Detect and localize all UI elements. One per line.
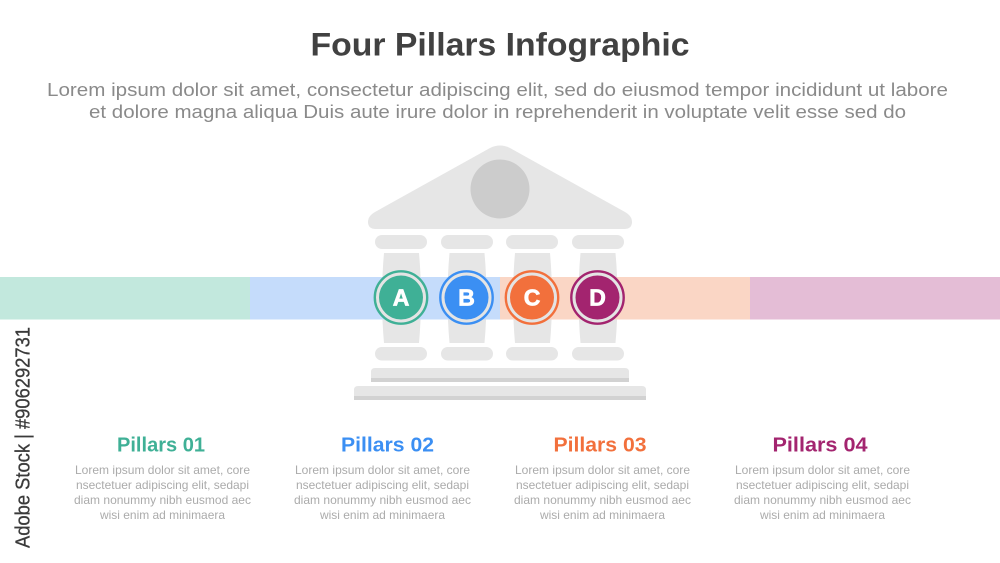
badge B: B bbox=[458, 284, 475, 310]
pillars 04 description: wisi enim ad minimaera bbox=[759, 508, 885, 522]
pillars 03 description bbox=[514, 463, 691, 522]
panel: pillars 01 bbox=[74, 434, 251, 522]
pillars 04 heading: Pillars 04 bbox=[772, 434, 868, 456]
panel: pillars 04 bbox=[734, 434, 911, 522]
pillars 04 description bbox=[734, 463, 911, 522]
pillars 01 heading: Pillars 01 bbox=[117, 434, 205, 456]
pillars 04 description: Lorem ipsum dolor sit amet, core bbox=[735, 463, 910, 477]
pillars 02 description: nsectetuer adipiscing elit, sedapi bbox=[296, 478, 469, 492]
pillars 01 description: Lorem ipsum dolor sit amet, core bbox=[75, 463, 250, 477]
pillars 02 description: diam nonummy nibh eusmod aec bbox=[294, 493, 471, 507]
pillars 02 description bbox=[294, 463, 471, 522]
badge B bbox=[440, 271, 493, 324]
panel: pillars 02 bbox=[294, 434, 471, 522]
pillars 04 description: diam nonummy nibh eusmod aec bbox=[734, 493, 911, 507]
title: Four Pillars Infographic bbox=[310, 26, 690, 62]
panel: pillars 03 bbox=[514, 434, 691, 522]
stock id side label: Adobe Stock | #906292731 bbox=[12, 327, 34, 548]
pillars 03 description: nsectetuer adipiscing elit, sedapi bbox=[516, 478, 689, 492]
subtitle text: Lorem ipsum dolor sit amet, consectetur adipiscing elit, sed do eiusmod tempor incididunt ut labore bbox=[47, 80, 948, 100]
pillars 02 description: Lorem ipsum dolor sit amet, core bbox=[295, 463, 470, 477]
temple columns bbox=[382, 253, 618, 343]
pillars 03 description: Lorem ipsum dolor sit amet, core bbox=[515, 463, 690, 477]
pillars 01 description bbox=[74, 463, 251, 522]
horizontal colour band bbox=[0, 277, 1000, 320]
temple roof bbox=[368, 146, 632, 229]
temple upper capitals bbox=[375, 235, 624, 249]
pillars 03 description: diam nonummy nibh eusmod aec bbox=[514, 493, 691, 507]
temple lower capitals bbox=[375, 347, 624, 360]
temple lower step bbox=[354, 386, 646, 400]
pillars 02 heading: Pillars 02 bbox=[341, 434, 434, 456]
badge D bbox=[571, 271, 624, 324]
badge A: A bbox=[393, 284, 409, 310]
pillars 03 description: wisi enim ad minimaera bbox=[539, 508, 665, 522]
badge A bbox=[375, 271, 427, 324]
pillars 01 description: nsectetuer adipiscing elit, sedapi bbox=[76, 478, 249, 492]
temple upper step bbox=[371, 368, 629, 382]
pillars 04 description: nsectetuer adipiscing elit, sedapi bbox=[736, 478, 909, 492]
icon: temple building bbox=[354, 146, 646, 400]
pillars 03 heading: Pillars 03 bbox=[554, 434, 646, 456]
pillars 01 description: diam nonummy nibh eusmod aec bbox=[74, 493, 251, 507]
pillars 02 description: wisi enim ad minimaera bbox=[319, 508, 445, 522]
badge C: C bbox=[524, 284, 540, 310]
subtitle text: et dolore magna aliqua Duis aute irure dolor in reprehenderit in voluptate velit esse sed do bbox=[89, 102, 906, 122]
subtitle text bbox=[47, 80, 948, 122]
pillars 01 description: wisi enim ad minimaera bbox=[99, 508, 225, 522]
badge C bbox=[506, 271, 558, 324]
temple roof medallion bbox=[470, 160, 530, 218]
badge D: D bbox=[589, 284, 606, 310]
